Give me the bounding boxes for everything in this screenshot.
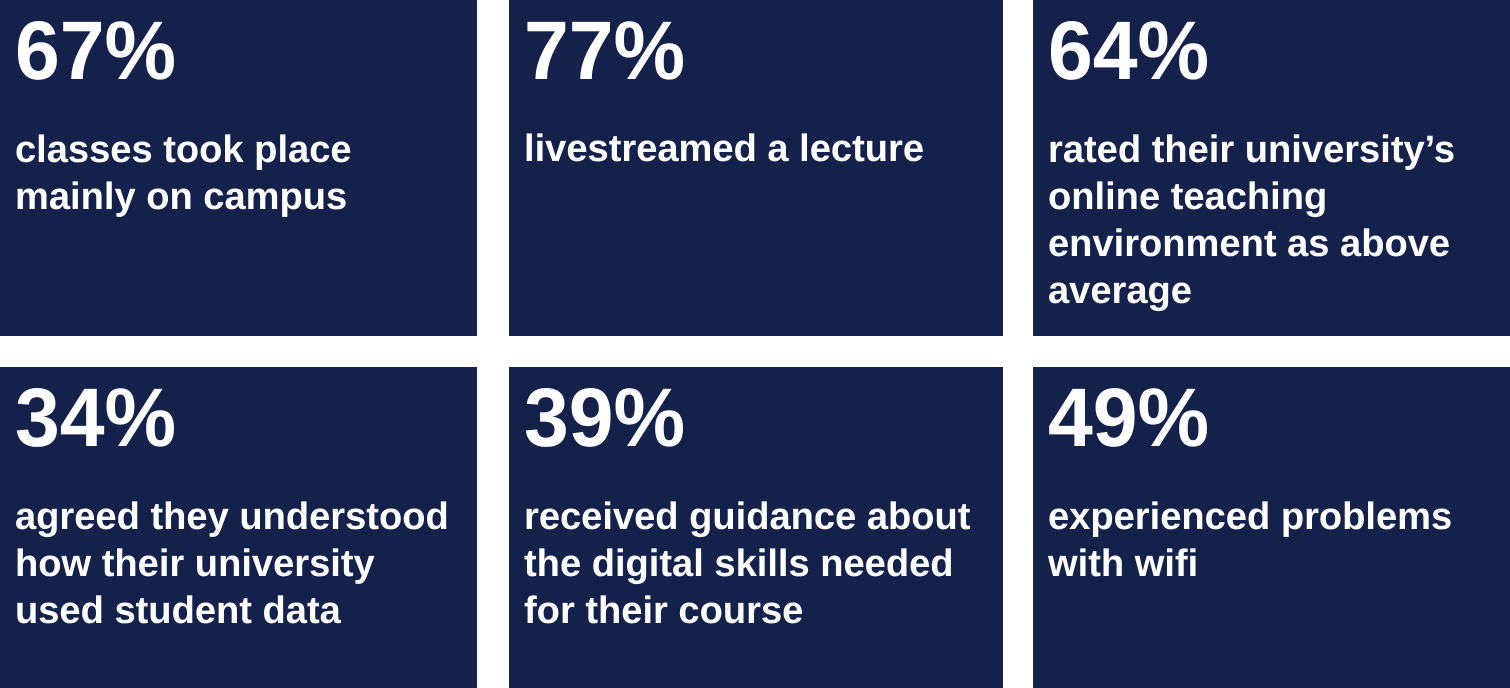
- text: digital skills guidance: the digital skills needed: [524, 543, 954, 585]
- panel: 77% livestreamed: [509, 0, 1003, 336]
- statistic: 34%: 34%: [15, 371, 176, 464]
- text: livestreamed a lecture: livestreamed a lecture: [524, 128, 924, 170]
- statistic: 77%: 77%: [524, 4, 685, 97]
- statistic: 39%: 39%: [524, 371, 685, 464]
- panel: 34% student data: [0, 367, 477, 688]
- panel: 64% online teaching: [1033, 0, 1510, 336]
- text: digital skills guidance: [524, 496, 970, 632]
- text: online teaching rating: average: [1048, 270, 1192, 312]
- text: wifi problems: with wifi: [1048, 543, 1198, 585]
- text: student data: used student data: [15, 590, 341, 632]
- text: online teaching rating: environment as above: [1048, 223, 1450, 265]
- text: student data: agreed they understood: [15, 496, 449, 538]
- text: student data: how their university: [15, 543, 375, 585]
- text: classes on campus: [15, 129, 352, 218]
- statistic: 49%: 49%: [1048, 371, 1209, 464]
- text: classes on campus: classes took place: [15, 129, 352, 171]
- text: online teaching rating: rated their university’s: [1048, 129, 1455, 171]
- text: wifi problems: [1048, 496, 1452, 585]
- statistic: 64%: 64%: [1048, 4, 1209, 97]
- text: wifi problems: experienced problems: [1048, 496, 1452, 538]
- panel: 49% wifi: [1033, 367, 1510, 688]
- text: classes on campus: mainly on campus: [15, 176, 347, 218]
- text: digital skills guidance: for their course: [524, 590, 803, 632]
- panel: 67% on campus: [0, 0, 477, 336]
- text: online teaching rating: [1048, 129, 1455, 312]
- statistic: 67%: 67%: [15, 4, 176, 97]
- text: digital skills guidance: received guidance about: [524, 496, 970, 538]
- panel: 39% digital skills: [509, 367, 1003, 688]
- text: student data: [15, 496, 449, 632]
- text: online teaching rating: online teaching: [1048, 176, 1327, 218]
